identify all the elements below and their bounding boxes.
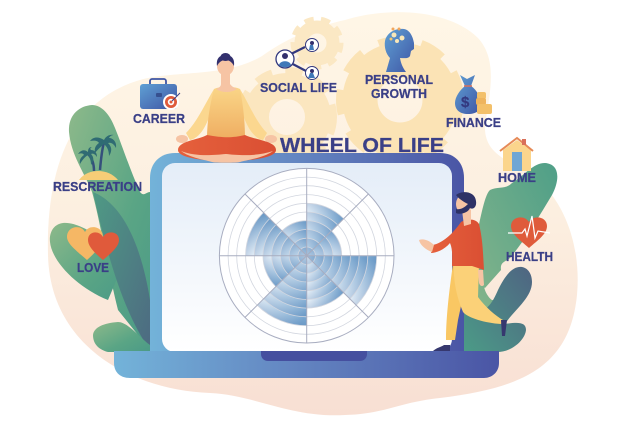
wheel chart xyxy=(219,168,394,343)
far leg xyxy=(446,264,470,340)
person: meditating woman xyxy=(176,53,277,163)
label: home: HOME xyxy=(498,171,536,185)
gear: lower left xyxy=(242,72,332,162)
shoes xyxy=(433,320,507,351)
label: rescreation: RESCREATION xyxy=(53,179,142,194)
title: WHEEL OF LIFE xyxy=(280,134,444,157)
filled sectors xyxy=(246,203,377,326)
icon: social network xyxy=(276,38,318,80)
gear: top xyxy=(294,20,340,66)
label: health: HEALTH xyxy=(506,249,553,264)
icon: money bag xyxy=(455,75,492,114)
icon: head with ideas xyxy=(385,28,414,72)
label: personal growth: PERSONAL xyxy=(365,72,433,87)
gear: large xyxy=(342,42,458,158)
concentric rings xyxy=(228,177,385,334)
label: personal growth xyxy=(365,72,433,101)
hair xyxy=(217,55,234,66)
laptop base xyxy=(114,351,499,378)
icon: briefcase xyxy=(140,79,180,110)
laptop screen xyxy=(162,163,452,352)
hand xyxy=(419,239,434,252)
icon: money bag: $ xyxy=(461,94,470,111)
near leg xyxy=(454,264,503,324)
person: bearded man xyxy=(419,192,507,351)
icon: heart with pulse xyxy=(508,216,550,248)
laptop lid xyxy=(150,153,464,352)
label: finance: FINANCE xyxy=(446,115,501,130)
neck and face xyxy=(216,72,237,92)
neck and face xyxy=(462,210,471,226)
icon: palm island xyxy=(78,135,118,180)
laptop notch xyxy=(261,351,367,361)
legs xyxy=(178,135,276,161)
background blob xyxy=(48,12,578,415)
icon: house xyxy=(500,138,533,171)
plants: left xyxy=(50,105,150,352)
label: social life: SOCIAL LIFE xyxy=(260,80,337,95)
feet xyxy=(181,151,273,163)
label: personal growth: GROWTH xyxy=(371,86,427,101)
laptop xyxy=(114,153,499,378)
label: career: CAREER xyxy=(133,111,186,126)
hair and beard xyxy=(456,192,476,214)
wheel disc xyxy=(219,168,394,343)
label: love: LOVE xyxy=(77,261,109,275)
icon: hearts xyxy=(67,227,119,260)
arms xyxy=(186,89,267,140)
torso xyxy=(207,87,245,138)
plants: right xyxy=(464,163,557,352)
torso and arm xyxy=(431,220,484,270)
hands xyxy=(176,135,188,143)
spokes xyxy=(219,168,394,343)
